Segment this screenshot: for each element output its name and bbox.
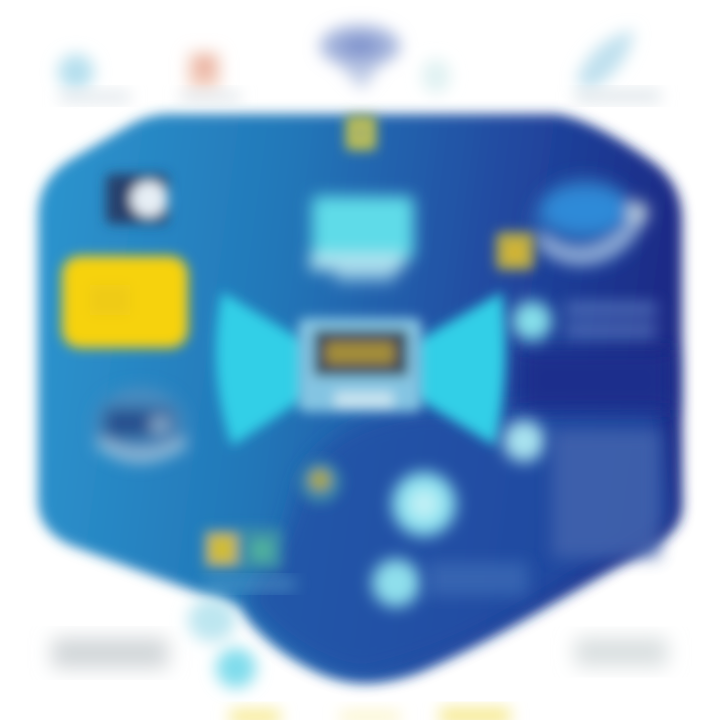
icon: top red-orange item [188, 52, 220, 90]
yellow connector square [346, 116, 376, 150]
bottom yellow strip [230, 708, 510, 720]
icon: right upper dot [512, 301, 552, 341]
icon: lower left yellow-teal badge [202, 528, 282, 570]
bow-tie: right wing [413, 292, 506, 446]
icon: top small teal [422, 59, 450, 93]
icon: top right leaf [576, 30, 634, 90]
icon: left lower ring [94, 387, 186, 463]
icon: top wifi funnel [320, 25, 400, 90]
yellow callout [62, 256, 188, 348]
icon: small yellow hub [496, 232, 534, 270]
lower left caption [205, 578, 295, 590]
icon: top left circle [58, 54, 94, 90]
bubble: large centre [392, 472, 456, 536]
bow-tie: left wing [216, 292, 308, 446]
right lower text block [552, 430, 660, 558]
icon: top right planet [531, 176, 648, 268]
top centre screen [310, 196, 414, 282]
bottom left label [52, 638, 168, 668]
top labels [60, 90, 660, 102]
right dots [503, 301, 552, 462]
icon: small yellow-teal marker [298, 460, 342, 504]
icon: right lower dot [503, 420, 545, 462]
lower text block [428, 562, 528, 596]
bottom right label [575, 638, 667, 666]
main hexagonal panel [38, 114, 682, 683]
darker lower wave [245, 400, 672, 675]
bottom figure [188, 598, 256, 688]
central chip [298, 318, 422, 412]
top icons row [58, 25, 634, 93]
icon: upper left dark and white badge [106, 174, 168, 224]
bubble: lower centre [372, 559, 420, 607]
right dark band [520, 350, 670, 410]
right upper text lines [565, 303, 657, 337]
